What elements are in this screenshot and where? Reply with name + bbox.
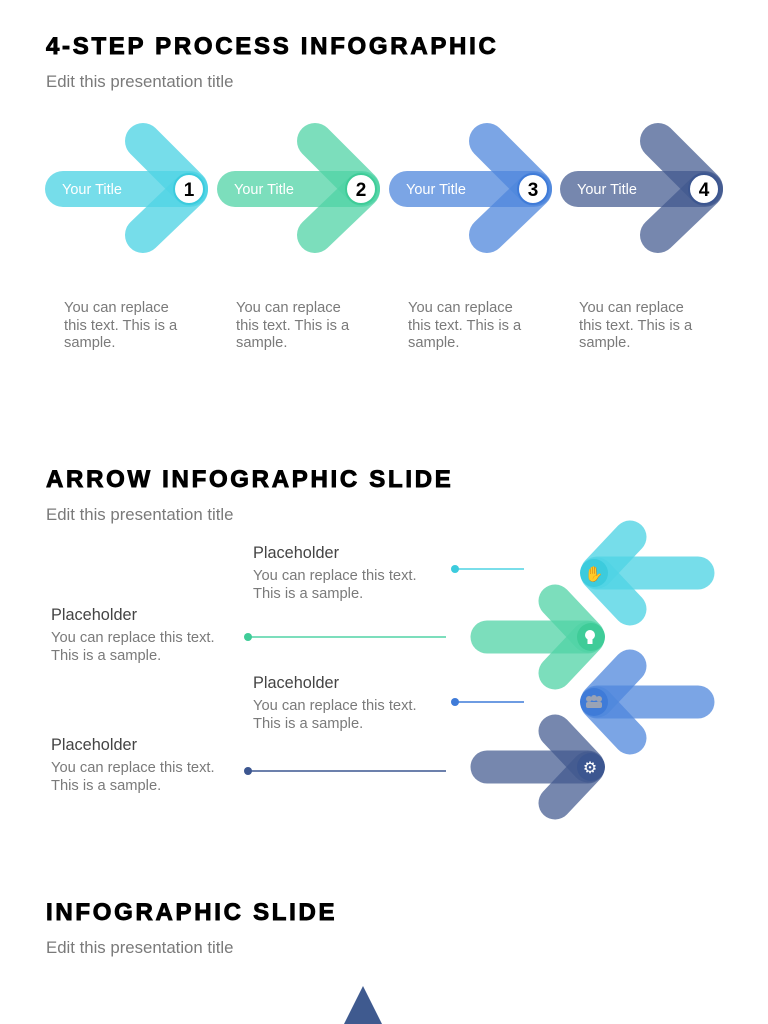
step text 3 bbox=[408, 300, 522, 351]
title: 4-step process: 4-STEP PROCESS INFOGRAPHIC bbox=[46, 33, 498, 60]
placeholder 1 bbox=[253, 544, 417, 602]
step text 1: You can replace bbox=[64, 300, 169, 316]
arrow 2 bbox=[234, 141, 376, 235]
placeholder 2 bbox=[51, 606, 215, 664]
step text 3: sample. bbox=[408, 335, 459, 351]
placeholder 3 bbox=[253, 674, 417, 732]
step text 2 bbox=[236, 300, 350, 351]
arrow 1 bbox=[62, 141, 204, 235]
placeholder 2: Placeholder bbox=[51, 606, 137, 624]
step text 2: this text. This is a bbox=[236, 318, 349, 334]
placeholder 4: Placeholder bbox=[51, 736, 137, 754]
arrow 4: 4 bbox=[699, 180, 710, 201]
step text 1 bbox=[64, 300, 178, 351]
arrow: cyan left bbox=[580, 537, 698, 609]
title: infographic slide: INFOGRAPHIC SLIDE bbox=[46, 899, 337, 926]
step text 3: You can replace bbox=[408, 300, 513, 316]
placeholder 2: You can replace this text. bbox=[51, 630, 215, 646]
step text 4: You can replace bbox=[579, 300, 684, 316]
arrow 4: Your Title bbox=[577, 182, 637, 198]
placeholder 4 bbox=[51, 736, 215, 794]
arrow 1: Your Title bbox=[62, 182, 122, 198]
placeholder 1: This is a sample. bbox=[253, 586, 363, 602]
arrow: navy right bbox=[487, 731, 605, 803]
step arrows row bbox=[45, 123, 723, 253]
arrow: blue left bbox=[580, 666, 698, 738]
connector lines bbox=[244, 565, 524, 775]
placeholder 4: You can replace this text. bbox=[51, 760, 215, 776]
step text 2: You can replace bbox=[236, 300, 341, 316]
arrow: green right bbox=[487, 601, 605, 673]
placeholder 1: Placeholder bbox=[253, 544, 339, 562]
step text 4: sample. bbox=[579, 335, 630, 351]
step text 1: this text. This is a bbox=[64, 318, 177, 334]
placeholder 3: You can replace this text. bbox=[253, 698, 417, 714]
step text 4: this text. This is a bbox=[579, 318, 692, 334]
step text 1: sample. bbox=[64, 335, 115, 351]
arrow: navy right: ⚙ bbox=[583, 758, 597, 777]
arrow 3: Your Title bbox=[406, 182, 466, 198]
placeholder 1: You can replace this text. bbox=[253, 568, 417, 584]
arrow 4 bbox=[577, 141, 719, 235]
arrow: cyan left: ✋ bbox=[585, 565, 603, 583]
subtitle 2: Edit this presentation title bbox=[46, 505, 234, 524]
arrow 2: 2 bbox=[356, 180, 366, 201]
arrow 3 bbox=[406, 141, 548, 235]
arrow 3: 3 bbox=[528, 180, 538, 201]
placeholder 3: This is a sample. bbox=[253, 716, 363, 732]
subtitle 3: Edit this presentation title bbox=[46, 938, 234, 957]
title: arrow infographic slide: ARROW INFOGRAPHIC SLIDE bbox=[46, 466, 453, 493]
arrow 1: 1 bbox=[184, 180, 195, 201]
step text 3: this text. This is a bbox=[408, 318, 521, 334]
step text 2: sample. bbox=[236, 335, 287, 351]
subtitle 1: Edit this presentation title bbox=[46, 72, 234, 91]
placeholder 3: Placeholder bbox=[253, 674, 339, 692]
placeholder 2: This is a sample. bbox=[51, 648, 161, 664]
arrow 2: Your Title bbox=[234, 182, 294, 198]
placeholder 4: This is a sample. bbox=[51, 778, 161, 794]
step text 4 bbox=[579, 300, 692, 351]
